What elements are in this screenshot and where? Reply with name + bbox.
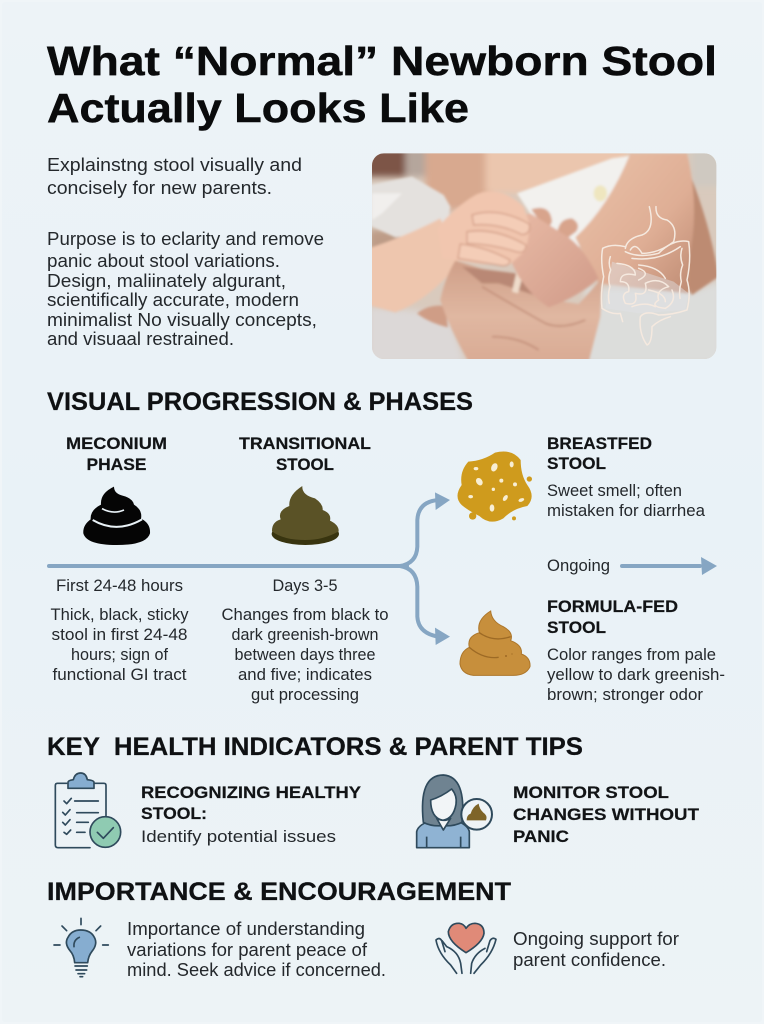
transitional stool heading [239, 435, 371, 474]
transitional timing and description [222, 577, 388, 704]
intro text: concisely for new parents. [47, 178, 272, 198]
purpose text: Design, maliinately algurant, [47, 271, 286, 291]
meconium timing and description: Thick, black, sticky [50, 606, 189, 624]
photo: parent's hand holding newborn foot with intestine outline [365, 147, 722, 363]
formula-fed stool text: yellow to dark greenish- [547, 666, 725, 684]
meconium timing and description: hours; sign of [71, 646, 168, 664]
foot [505, 213, 599, 307]
recognizing healthy stool text: RECOGNIZING HEALTHY [141, 784, 361, 802]
meconium timing and description: stool in first 24-48 [52, 626, 188, 644]
monitor stool changes text: MONITOR STOOL [513, 784, 669, 802]
icon: heart in hands [436, 923, 496, 973]
monitor stool changes text [513, 784, 699, 846]
icon: clipboard checklist [55, 773, 121, 848]
breastfed stool text: mistaken for diarrhea [547, 502, 706, 520]
purpose text: minimalist No visually concepts, [47, 310, 317, 330]
leg [665, 163, 719, 295]
recognizing healthy stool text: STOOL: [141, 805, 207, 823]
transitional timing and description: Days 3-5 [272, 577, 338, 595]
intestine outline [601, 207, 690, 345]
icon: meconium stool [83, 487, 150, 545]
intro text: Explainstng stool visually and [47, 155, 302, 175]
formula-fed stool text [547, 598, 725, 704]
purpose text: and visuaal restrained. [47, 329, 234, 349]
ongoing label with arrow [547, 557, 717, 575]
meconium timing and description: functional GI tract [52, 666, 187, 684]
breastfed stool text [547, 435, 706, 520]
transitional stool heading: STOOL [276, 456, 334, 474]
meconium timing and description [50, 577, 189, 684]
diaper [517, 155, 635, 247]
transitional timing and description: and five; indicates [238, 666, 372, 684]
intro text [47, 155, 302, 198]
transitional timing and description: Changes from black to [222, 606, 388, 624]
icon: formula-fed stool [460, 611, 530, 675]
formula-fed stool text: STOOL [547, 619, 606, 637]
timeline bar [47, 564, 409, 568]
formula-fed stool text: FORMULA-FED [547, 598, 678, 616]
ongoing support text: parent confidence. [513, 950, 666, 970]
breastfed stool text: STOOL [547, 455, 606, 473]
left cloth [369, 177, 450, 237]
ongoing support text [513, 929, 679, 970]
purpose text [47, 229, 324, 349]
baby hand [437, 191, 530, 265]
transitional stool heading: TRANSITIONAL [239, 435, 371, 453]
recognizing healthy stool text [141, 784, 361, 846]
title: What “Normal” Newborn Stool [47, 38, 717, 84]
formula-fed stool text: brown; stronger odor [547, 686, 704, 704]
arrow: branches to breastfed and formula-fed [400, 492, 450, 645]
ongoing label with arrow: Ongoing [547, 557, 610, 575]
purpose text: Purpose is to eclarity and remove [47, 229, 324, 249]
heading: visual progression: VISUAL PROGRESSION & PHASES [47, 388, 473, 416]
toes behind [531, 208, 552, 232]
recognizing healthy stool text: Identify potential issues [141, 828, 336, 846]
parent hand [440, 261, 602, 362]
title: Actually Looks Like [47, 85, 469, 131]
formula-fed stool text: Color ranges from pale [547, 646, 716, 664]
meconium phase heading [66, 435, 167, 474]
transitional timing and description: dark greenish-brown [232, 626, 378, 644]
monitor stool changes text: PANIC [513, 828, 569, 846]
heading: key health indicators: KEY HEALTH INDICATORS & PARENT TIPS [47, 733, 583, 761]
icon: parent with stool badge [417, 775, 492, 848]
meconium phase heading: MECONIUM [66, 435, 167, 453]
icon: transitional stool [272, 486, 339, 545]
transitional timing and description: between days three [234, 646, 376, 664]
monitor stool changes text: CHANGES WITHOUT [513, 806, 699, 824]
importance text: mind. Seek advice if concerned. [127, 960, 386, 980]
meconium timing and description: First 24-48 hours [56, 577, 183, 595]
icon: light bulb [54, 918, 108, 977]
importance text: variations for parent peace of [127, 940, 368, 960]
purpose text: panic about stool variations. [47, 251, 280, 271]
icon: breastfed stool [457, 451, 532, 522]
breastfed stool text: BREASTFED [547, 435, 652, 453]
importance text [127, 919, 386, 980]
transitional timing and description: gut processing [251, 686, 359, 704]
title [47, 38, 717, 131]
importance text: Importance of understanding [127, 919, 365, 939]
left arm [369, 218, 459, 312]
meconium phase heading: PHASE [86, 456, 146, 474]
breastfed stool text: Sweet smell; often [547, 482, 682, 500]
purpose text: scientifically accurate, modern [47, 290, 299, 310]
heading: importance: IMPORTANCE & ENCOURAGEMENT [47, 878, 511, 906]
ongoing support text: Ongoing support for [513, 929, 679, 949]
